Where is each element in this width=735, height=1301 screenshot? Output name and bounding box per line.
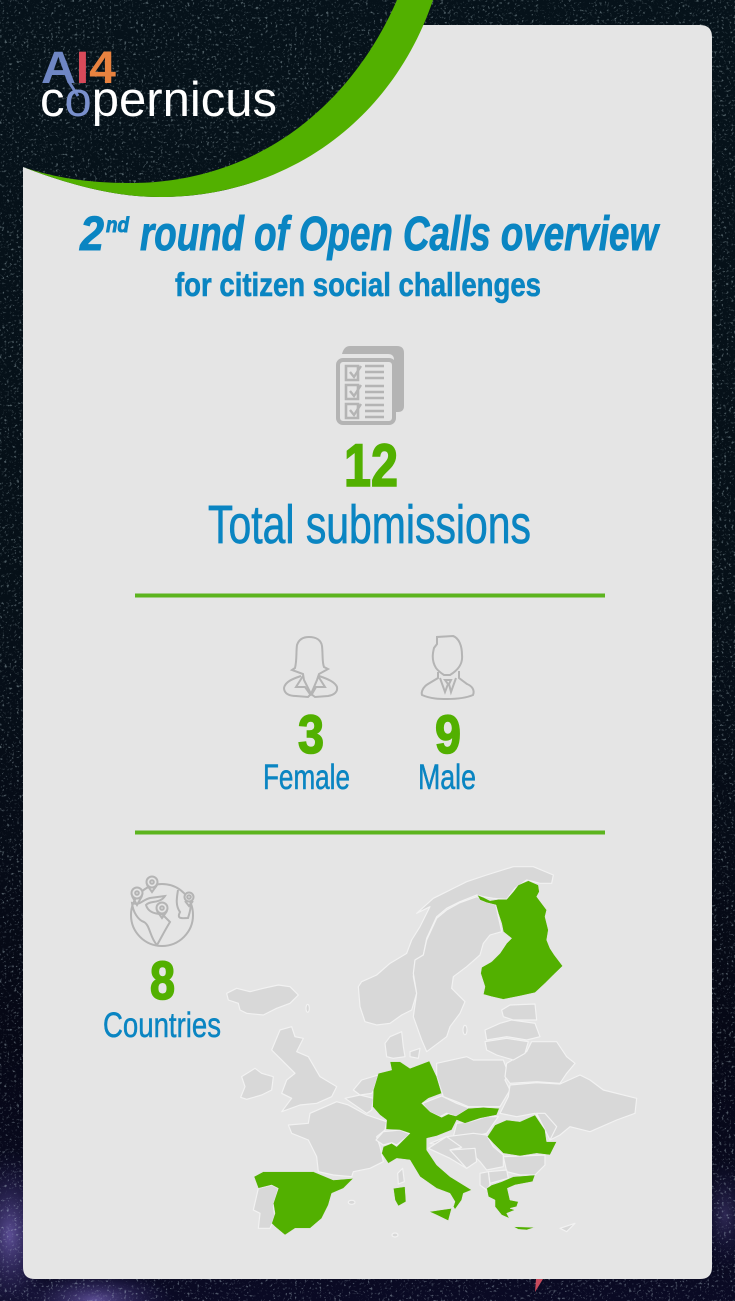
number: 8: 8 xyxy=(150,951,175,1011)
icon: globe with pins xyxy=(131,876,194,946)
title: 2 xyxy=(79,208,104,261)
grey countries xyxy=(227,867,637,1237)
logo: AI4 Copernicus: copernicus xyxy=(40,73,277,127)
green swoosh xyxy=(23,0,433,197)
number: male 9: 9 xyxy=(435,705,461,765)
label: countries: Countries xyxy=(103,1006,221,1045)
number: 12: 12 xyxy=(344,432,398,499)
highlighted countries xyxy=(254,881,563,1235)
logo: AI4 Copernicus xyxy=(40,42,277,127)
icon: male xyxy=(422,636,474,699)
label: male: Male xyxy=(418,758,476,797)
map: Europe xyxy=(227,867,637,1237)
label: total submissions: Total submissions xyxy=(208,495,531,555)
logo: AI4 Copernicus: AI4 xyxy=(41,42,116,93)
number: female 3: 3 xyxy=(298,705,324,765)
icon: female xyxy=(284,637,337,697)
icon: checklist documents xyxy=(338,346,404,423)
subtitle: for citizen social challenges xyxy=(175,266,541,303)
label: female: Female xyxy=(263,758,350,797)
title: nd xyxy=(106,214,130,237)
